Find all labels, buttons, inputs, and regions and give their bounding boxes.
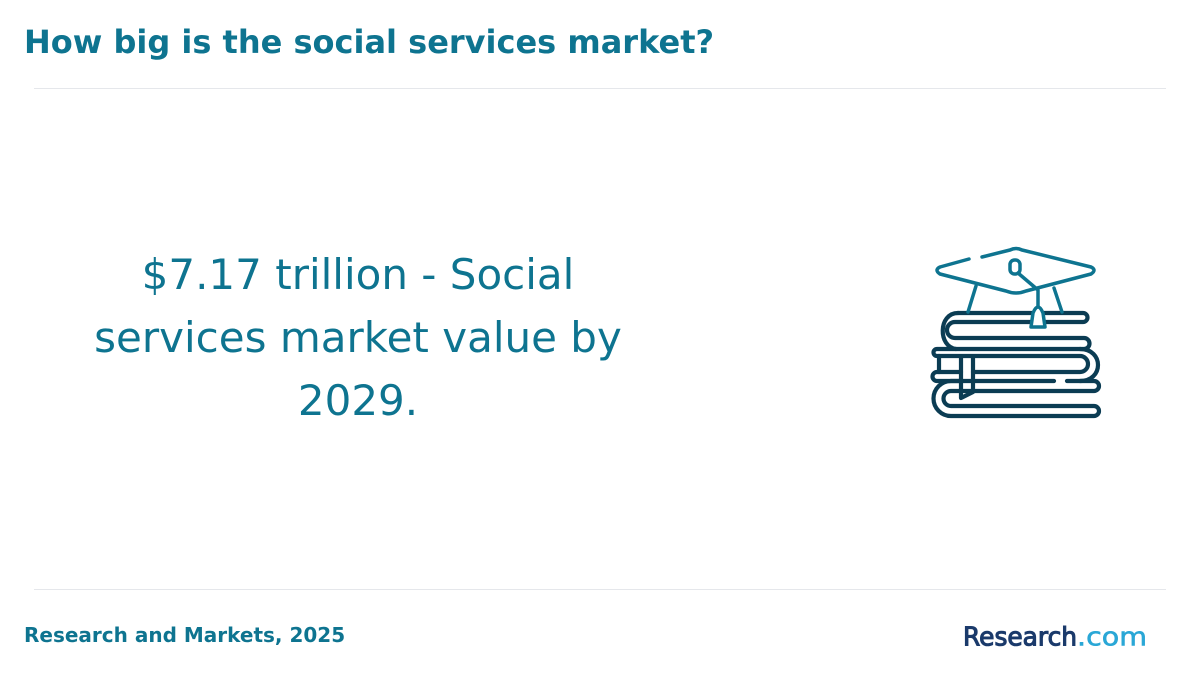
source note: Research and Markets, 2025 [24,623,345,647]
main statistic text [94,250,622,425]
title: How big is the social services market? [24,23,714,61]
main statistic text: 2029. [298,376,418,425]
main statistic text: services market value by [94,313,622,362]
icon: graduation cap [937,248,1094,327]
icon: stacked books [932,313,1099,416]
logo: Research.com: Research [963,622,1077,652]
logo: Research.com: .com [1077,622,1147,652]
main statistic text: $7.17 trillion - Social [142,250,574,299]
logo: Research.com [963,622,1147,652]
icon: graduation cap on stacked books [930,246,1102,418]
